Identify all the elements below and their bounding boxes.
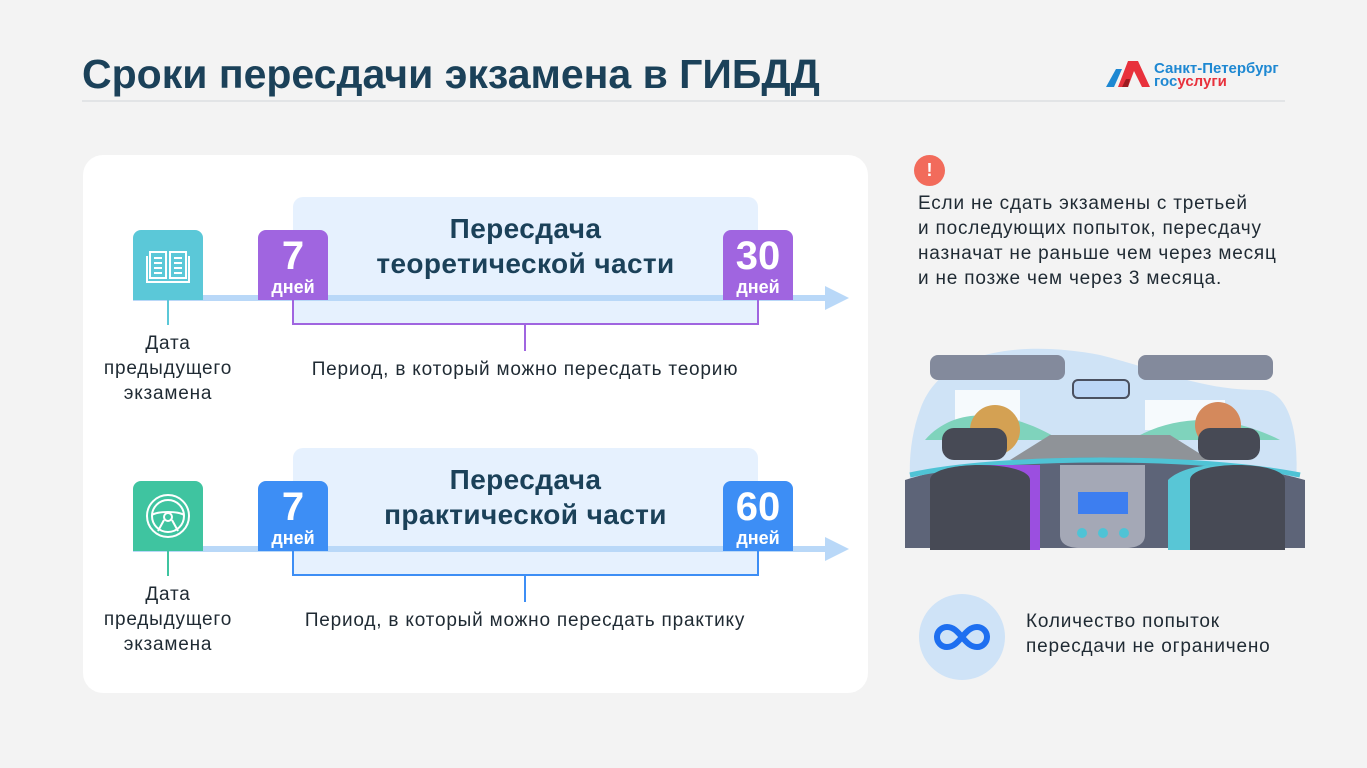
text: date: экзамена <box>124 383 212 404</box>
heading: practice: практической части <box>384 499 667 530</box>
title: Сроки пересдачи экзамена в ГИБДД <box>82 51 820 97</box>
badge: 7 days: 7 <box>282 485 304 529</box>
icon: warning: ! <box>926 160 932 180</box>
text: attempts <box>1026 611 1271 657</box>
badge: 7 days <box>258 230 328 300</box>
text: date <box>104 584 232 655</box>
text: attempts: Количество попыток <box>1026 611 1220 632</box>
badge: 7 days: 7 <box>282 234 304 278</box>
badge: 60 days <box>723 481 793 551</box>
logo: Санкт-Петербург <box>1154 60 1279 77</box>
badge: 60 days: дней <box>736 528 780 548</box>
badge: 30 days: 30 <box>736 234 780 278</box>
icon: steering wheel <box>133 481 203 551</box>
text: date <box>104 333 232 404</box>
text: date: Дата <box>145 584 191 605</box>
illustration: car interior <box>905 348 1305 550</box>
text: date: предыдущего <box>104 609 232 630</box>
badge: 30 days <box>723 230 793 300</box>
badge: 7 days: дней <box>271 528 315 548</box>
heading: theory: Пересдача <box>450 213 601 244</box>
badge: 30 days: дней <box>736 277 780 297</box>
text: note <box>918 193 1277 289</box>
text: note: назначат не раньше чем через месяц <box>918 243 1277 264</box>
timeline: practice <box>104 448 849 655</box>
text: date: предыдущего <box>104 358 232 379</box>
heading: theory <box>376 213 675 279</box>
icon: infinity <box>919 594 1005 680</box>
heading: practice: Пересдача <box>450 464 601 495</box>
text: period: Период, в который можно пересдать практику <box>305 610 745 631</box>
badge: 7 days: дней <box>271 277 315 297</box>
text: date: экзамена <box>124 634 212 655</box>
text: period: Период, в который можно пересдать теорию <box>312 359 738 380</box>
heading: theory: теоретической части <box>376 248 675 279</box>
logo: госуслуги <box>1154 73 1227 90</box>
text: attempts: пересдачи не ограничено <box>1026 636 1271 657</box>
icon: book <box>133 230 203 300</box>
logo <box>1106 60 1279 90</box>
badge: 7 days <box>258 481 328 551</box>
text: note: и не позже чем через 3 месяца. <box>918 268 1222 289</box>
icon: warning <box>914 155 945 186</box>
timeline: theory <box>104 197 849 404</box>
badge: 60 days: 60 <box>736 485 780 529</box>
panel: timelines <box>83 155 868 693</box>
text: note: и последующих попыток, пересдачу <box>918 218 1262 239</box>
text: date: Дата <box>145 333 191 354</box>
heading: practice <box>384 464 667 530</box>
text: note: Если не сдать экзамены с третьей <box>918 193 1248 214</box>
